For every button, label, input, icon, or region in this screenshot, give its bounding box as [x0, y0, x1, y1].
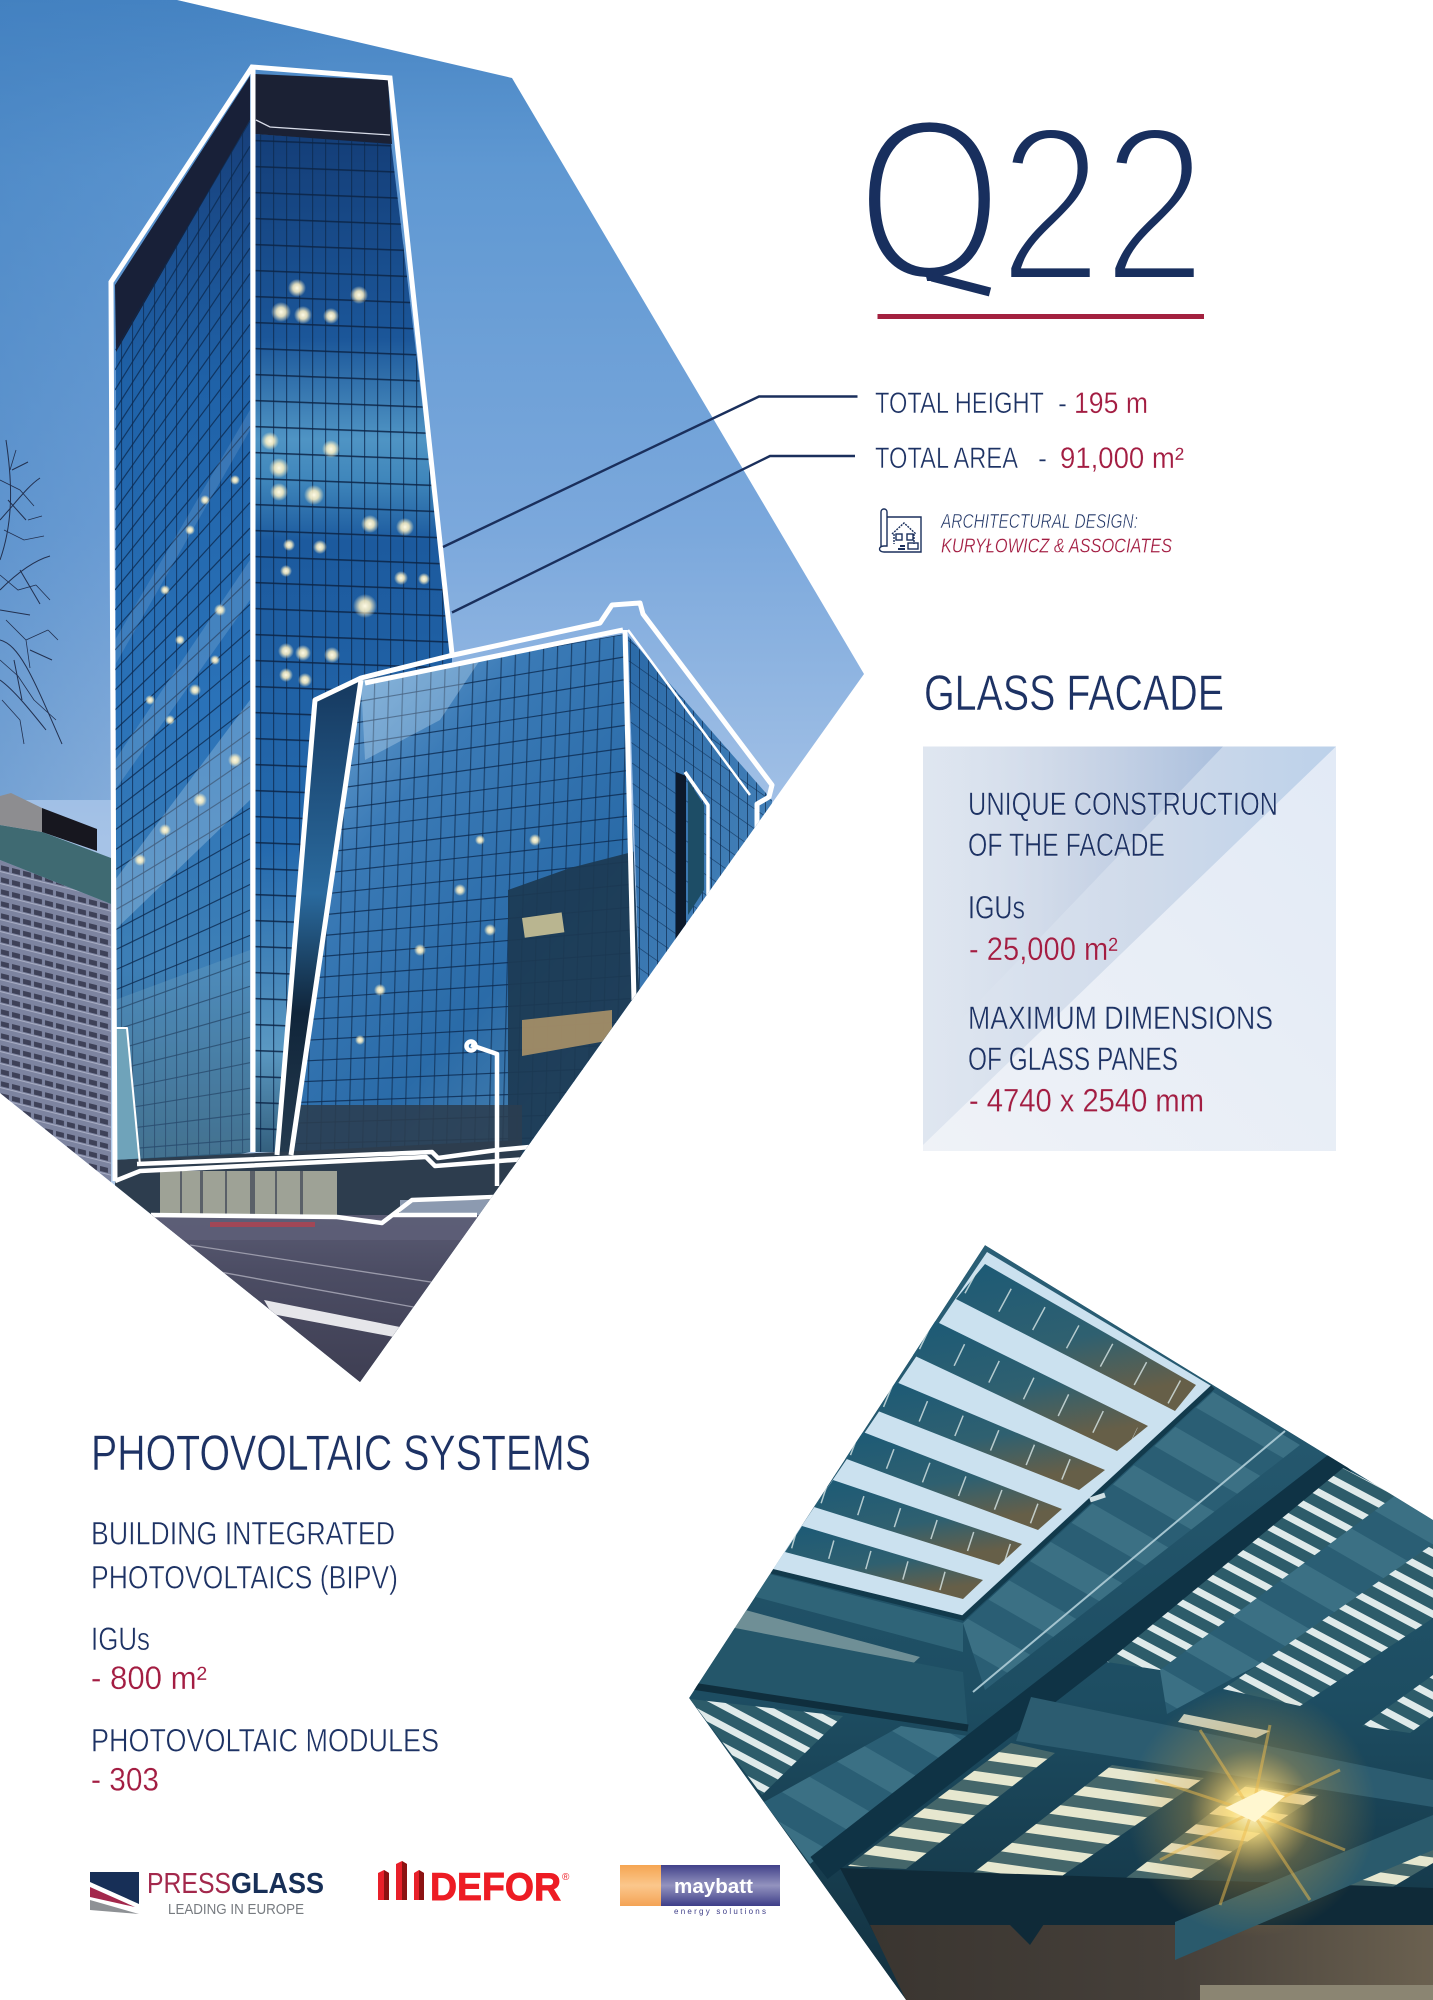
title Q22 — [869, 122, 1194, 296]
photovoltaic details text: IGUs — [91, 1621, 150, 1657]
logo: Press Glass: PRESS — [147, 1868, 231, 1900]
stat: total area: - — [1038, 442, 1047, 475]
photovoltaic details text: PHOTOVOLTAICS (BIPV) — [91, 1560, 398, 1596]
facade text: - 4740 x 2540 mm — [969, 1082, 1204, 1118]
bare tree branches — [0, 440, 62, 744]
white outline: lower building — [115, 603, 772, 1165]
ground floor and street — [115, 1140, 520, 1382]
logo: Press Glass: LEADING IN EUROPE — [168, 1902, 304, 1918]
logo: Press Glass — [90, 1868, 324, 1918]
cross beam — [1016, 1697, 1433, 1807]
stat: total height: TOTAL HEIGHT — [875, 387, 1044, 420]
facade text: IGUs — [968, 890, 1025, 926]
logo: Maybatt: energy solutions — [674, 1907, 766, 1916]
tower left face — [115, 76, 255, 1180]
logo: Maybatt — [620, 1865, 780, 1916]
logo: Maybatt: maybatt — [674, 1876, 753, 1898]
sun flare — [1136, 1696, 1368, 1928]
lower building right face — [628, 636, 772, 1010]
panel: glass facade details — [923, 746, 1336, 1151]
architectural design credit: KURYŁOWICZ & ASSOCIATES — [941, 536, 1173, 558]
photovoltaic details text — [91, 1516, 439, 1798]
title Q22: 22 — [998, 81, 1206, 329]
photovoltaic details text: BUILDING INTEGRATED — [91, 1516, 395, 1552]
main diagonal beams — [764, 1392, 1343, 1868]
photovoltaic details text: - 800 m² — [91, 1660, 207, 1696]
stat: total height: - — [1058, 387, 1067, 420]
logo: Defor: DEFOR — [430, 1866, 561, 1909]
white outline: street level and lamp — [115, 1042, 540, 1223]
logo: Press Glass: GLASS — [231, 1868, 324, 1900]
stat: total area: 91,000 m² — [1060, 442, 1184, 475]
stat: total area: TOTAL AREA — [875, 442, 1018, 475]
lower-left PV bay — [690, 1699, 843, 1795]
architectural design credit — [940, 511, 1173, 558]
heading: photovoltaic systems: PHOTOVOLTAIC SYSTEMS — [91, 1425, 591, 1481]
architectural design credit: ARCHITECTURAL DESIGN: — [940, 511, 1138, 533]
title underline — [878, 314, 1204, 319]
logo: Defor: ® — [562, 1872, 570, 1883]
callout line: total area — [452, 456, 855, 612]
horizontal beams on the left — [692, 1574, 968, 1731]
tower window lights — [134, 279, 430, 866]
facade text: UNIQUE CONSTRUCTION — [968, 786, 1278, 822]
photo: Q22 tower against blue sky — [0, 0, 870, 1400]
photo: photovoltaic glass roof — [689, 1245, 1433, 2000]
title Q22: Q — [857, 71, 1002, 328]
facade text — [968, 786, 1278, 1118]
lower building front face — [280, 620, 645, 1180]
logo: Defor — [378, 1861, 570, 1909]
facade text: MAXIMUM DIMENSIONS — [968, 1000, 1273, 1036]
callout line: total height — [443, 396, 858, 547]
tower front face — [255, 74, 452, 1152]
facade text: OF THE FACADE — [968, 827, 1165, 863]
heading: glass facade: GLASS FACADE — [924, 665, 1224, 721]
facade text: OF GLASS PANES — [968, 1041, 1178, 1077]
stat: total area — [875, 442, 1184, 475]
stat: total height: 195 m — [1074, 387, 1148, 420]
lower PV bays — [848, 1743, 1433, 1888]
photovoltaic details text: - 303 — [91, 1762, 159, 1798]
upper-right PV bays — [1107, 1468, 1433, 1738]
slanted dark wedge — [277, 680, 361, 1155]
adjacent building on the left — [0, 793, 111, 1190]
facade text: - 25,000 m² — [969, 931, 1118, 967]
white outline: tower — [111, 67, 452, 1181]
photovoltaic details text: PHOTOVOLTAIC MODULES — [91, 1722, 439, 1758]
upper PV panel bay — [771, 1252, 1213, 1618]
interior wall and lower beam — [840, 1815, 1433, 2000]
icon: architectural blueprint — [880, 509, 921, 552]
